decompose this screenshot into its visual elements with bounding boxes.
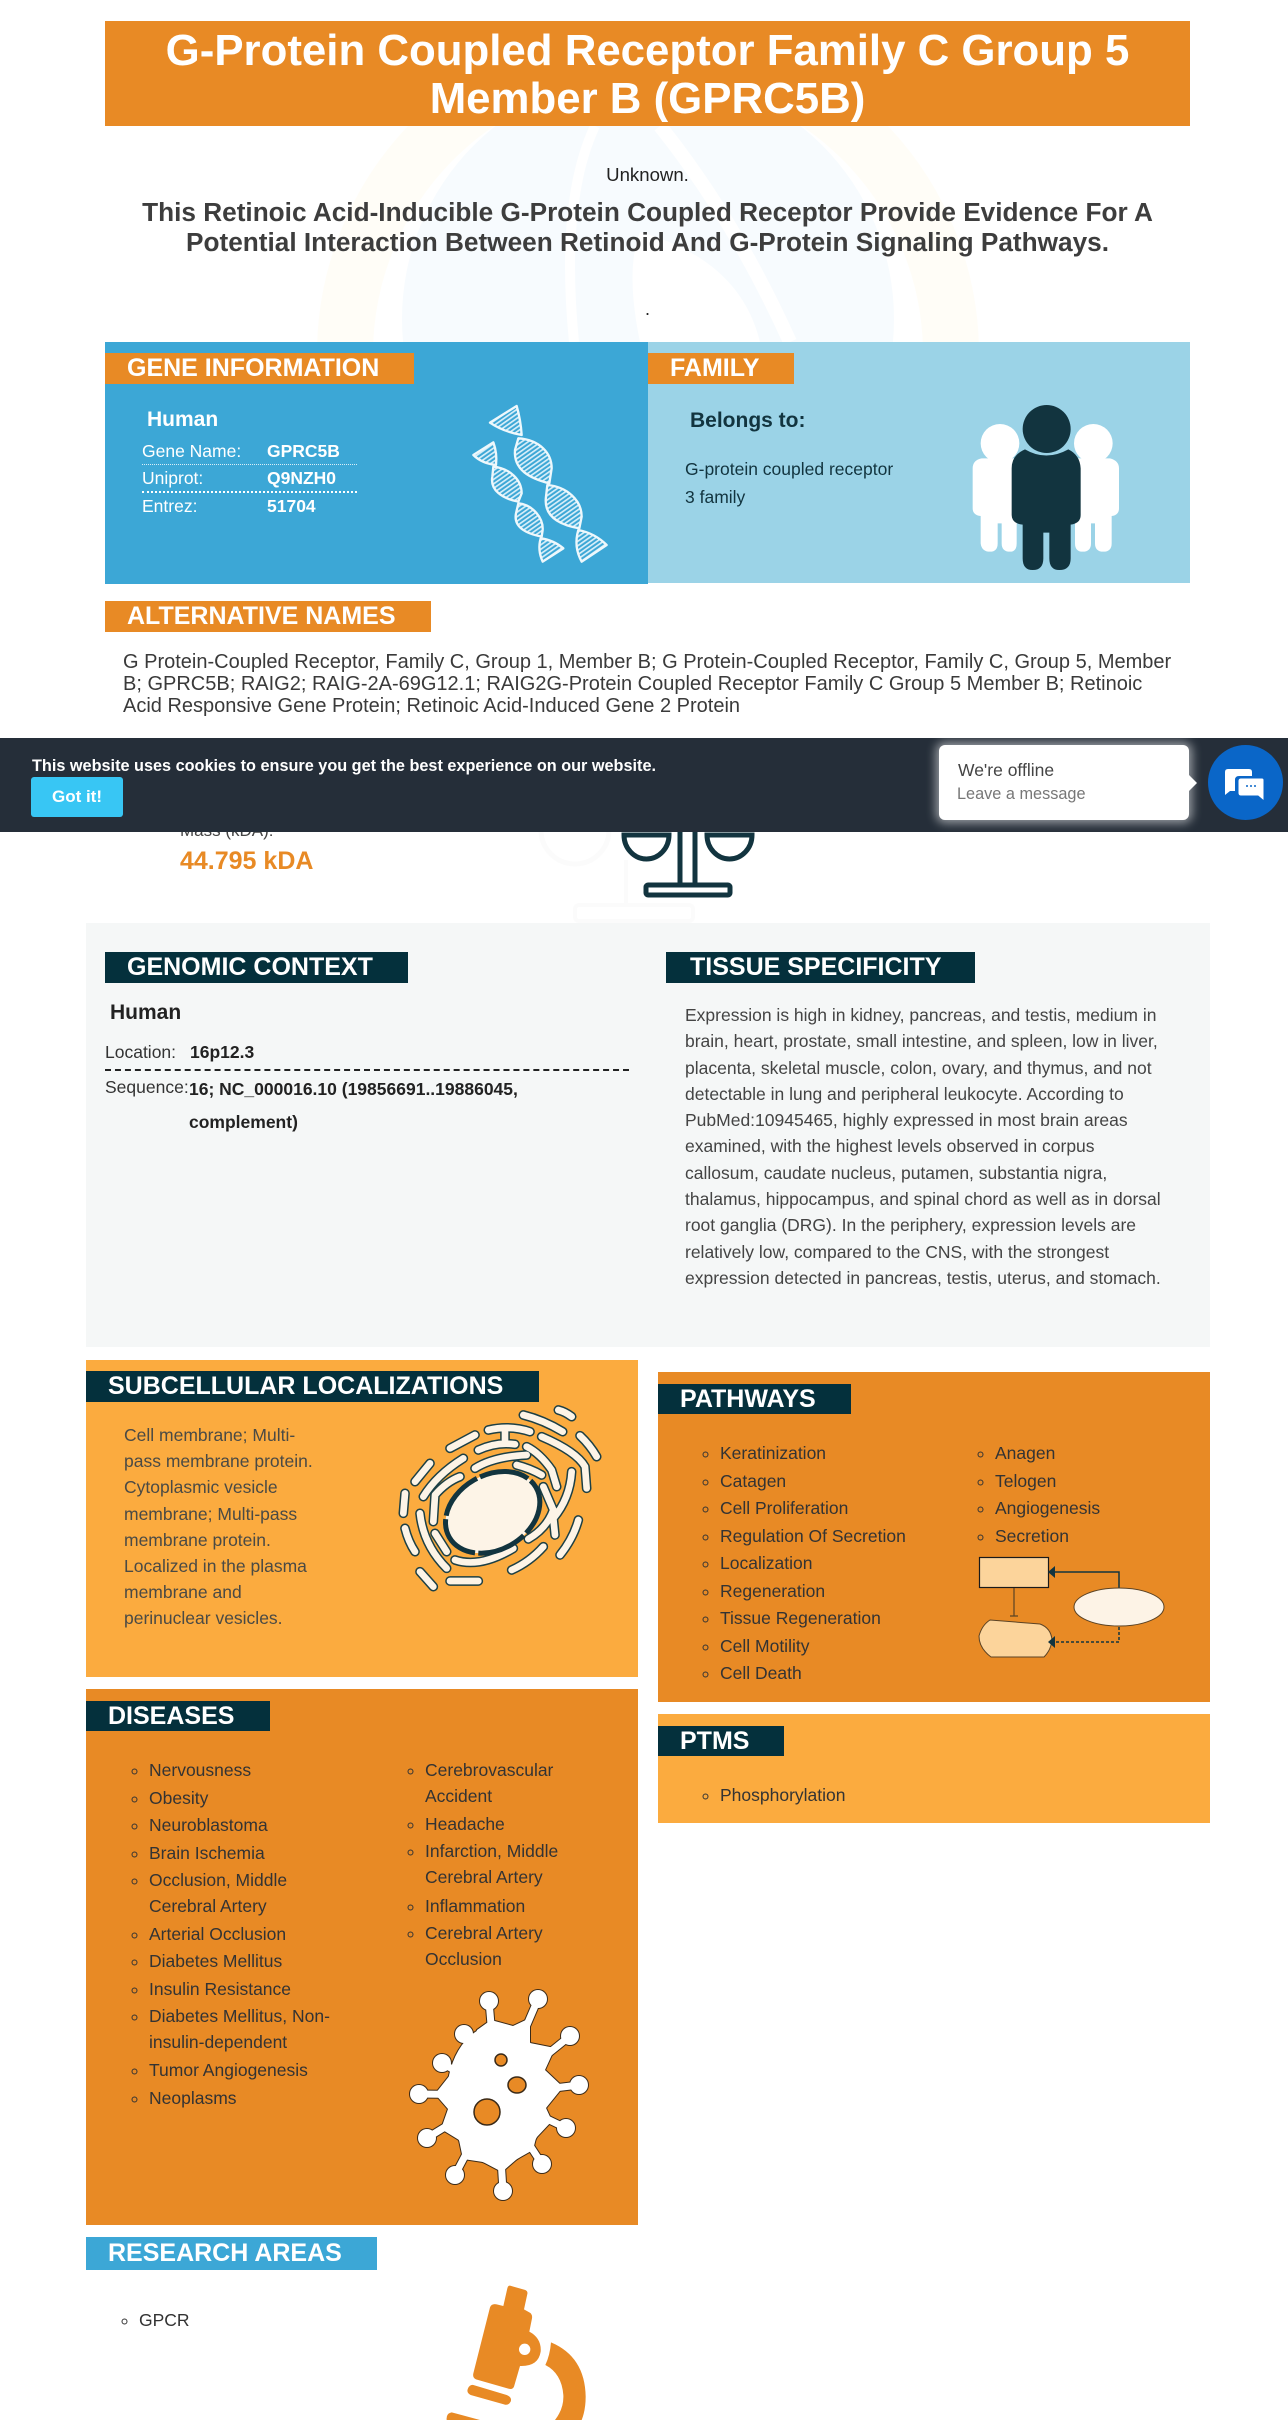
tissue specificity text: relatively low, compared to the CNS, with the strongest: [685, 1242, 1109, 1262]
panel: diseases: [86, 1689, 638, 2225]
cookie bar: [0, 738, 1288, 832]
species label: Human: [110, 1001, 181, 1024]
pathways list column 1: Keratinization: [720, 1443, 826, 1463]
sequence row: 16; NC_000016.10 (19856691..19886045,: [189, 1079, 518, 1099]
pathways list column 1: Tissue Regeneration: [720, 1608, 881, 1628]
tissue specificity text: expression detected in pancreas, testis, uterus, and stomach.: [685, 1268, 1161, 1288]
subcellular text: perinuclear vesicles.: [124, 1608, 283, 1628]
sequence row: Sequence:: [105, 1077, 189, 1097]
heading: family: FAMILY: [670, 354, 759, 382]
diseases list column 1: Arterial Occlusion: [149, 1924, 286, 1944]
diseases list column 2: Accident: [425, 1786, 492, 1806]
diseases list column 1: Cerebral Artery: [149, 1896, 267, 1916]
panel: subcellular localizations: [86, 1360, 638, 1677]
tissue specificity text: Expression is high in kidney, pancreas, and testis, medium in: [685, 1005, 1156, 1025]
tissue specificity text: [685, 1005, 1161, 1288]
pathways list column 2: Secretion: [995, 1526, 1069, 1546]
diseases list column 2: Infarction, Middle: [425, 1841, 558, 1861]
research areas list: GPCR: [139, 2310, 190, 2330]
cookie button: [31, 777, 123, 817]
diseases list column 1: Brain Ischemia: [149, 1843, 265, 1863]
sequence row: [105, 1077, 518, 1132]
pathways list column 1: Localization: [720, 1553, 812, 1573]
function text: Unknown.: [606, 164, 689, 185]
title banner: G-Protein Coupled Receptor Family C Group 5: [166, 26, 1129, 75]
heading: research areas: RESEARCH AREAS: [108, 2239, 342, 2267]
tissue specificity text: examined, with the highest levels observed in corpus: [685, 1136, 1095, 1156]
panel: ptms: [658, 1714, 1210, 1823]
pathways list column 2: Telogen: [995, 1471, 1056, 1491]
alternative names text: B; GPRC5B; RAIG2; RAIG-2A-69G12.1; RAIG2G-Protein Coupled Receptor Family C Group 5 Member B; Retinoic: [123, 673, 1142, 695]
heading: family: [648, 353, 794, 384]
pathways list column 2: Anagen: [995, 1443, 1055, 1463]
pathways list column 1: Cell Motility: [720, 1636, 809, 1656]
chat button: [1208, 745, 1283, 820]
icon: chat bubbles: [1225, 769, 1264, 800]
location row: Location:: [105, 1042, 176, 1062]
tissue specificity text: thalamus, hippocampus, and spinal chord as well as in dorsal: [685, 1189, 1161, 1209]
heading: alternative names: ALTERNATIVE NAMES: [127, 602, 396, 630]
species label: Human: [147, 408, 218, 431]
heading: pathways: [658, 1384, 851, 1414]
pathways list column 2: [978, 1443, 1100, 1546]
diseases list column 1: Insulin Resistance: [149, 1979, 291, 1999]
pathways list column 2: Angiogenesis: [995, 1498, 1100, 1518]
alternative names text: G Protein-Coupled Receptor, Family C, Group 1, Member B; G Protein-Coupled Receptor, Family C, Group 5, Member: [123, 651, 1171, 673]
heading: genomic context: GENOMIC CONTEXT: [127, 953, 373, 981]
panel: family: [648, 342, 1190, 583]
subcellular text: membrane; Multi-pass: [124, 1504, 297, 1524]
pathways list column 1: Regeneration: [720, 1581, 825, 1601]
heading: research areas: [86, 2237, 377, 2270]
heading: gene information: GENE INFORMATION: [127, 354, 379, 382]
icon: pathway diagram: [978, 1556, 1164, 1658]
dot text: .: [645, 299, 650, 319]
diseases list column 2: Cerebral Artery: [425, 1923, 543, 1943]
pathways list column 1: [702, 1443, 906, 1683]
location row: 16p12.3: [190, 1042, 254, 1062]
diseases list column 2: Occlusion: [425, 1949, 502, 1969]
subcellular text: pass membrane protein.: [124, 1451, 313, 1471]
panel: gene information: [105, 342, 648, 584]
icon: virus: [409, 1989, 589, 2201]
tissue specificity text: detectable in lung and peripheral leukocyte. According to: [685, 1084, 1124, 1104]
diseases list column 1: insulin-dependent: [149, 2032, 287, 2052]
icon: organelle: [398, 1405, 602, 1592]
heading: ptms: PTMS: [680, 1727, 749, 1755]
subcellular text: [124, 1425, 313, 1628]
gene table: 51704: [267, 496, 316, 516]
heading: diseases: [86, 1701, 270, 1731]
diseases list column 1: Diabetes Mellitus: [149, 1951, 282, 1971]
chat subtitle: Leave a message: [957, 785, 1086, 803]
panel: genomic context and tissue specificity: [86, 923, 1210, 1347]
heading: pathways: PATHWAYS: [680, 1385, 816, 1413]
diseases list column 2: Cerebrovascular: [425, 1760, 553, 1780]
pathways list column 1: Regulation Of Secretion: [720, 1526, 906, 1546]
diseases list column 1: [132, 1760, 330, 2108]
tissue specificity text: callosum, caudate nucleus, putamen, substantia nigra,: [685, 1163, 1107, 1183]
gene table: GPRC5B: [267, 441, 340, 461]
ptms list: Phosphorylation: [720, 1785, 846, 1805]
location row: [105, 1042, 629, 1071]
chat bubble pointer: [1189, 775, 1197, 791]
icon: dna helix: [472, 404, 608, 563]
belongs to label: Belongs to:: [690, 409, 806, 432]
diseases list column 1: Neoplasms: [149, 2088, 237, 2108]
subcellular text: membrane and: [124, 1582, 242, 1602]
family text: G-protein coupled receptor: [685, 459, 893, 479]
heading: ptms: [658, 1726, 784, 1756]
tissue specificity text: root ganglia (DRG). In the periphery, expression levels are: [685, 1215, 1136, 1235]
sequence row: complement): [189, 1112, 298, 1132]
panel: pathways: [658, 1372, 1210, 1702]
family text: 3 family: [685, 487, 745, 507]
diseases list column 1: Neuroblastoma: [149, 1815, 268, 1835]
icon: microscope: [446, 2286, 586, 2420]
alternative names text: [123, 651, 1171, 717]
diseases list column 2: Headache: [425, 1814, 505, 1834]
cookie button: Got it!: [52, 787, 102, 806]
subtitle: [142, 197, 1153, 257]
heading: diseases: DISEASES: [108, 1702, 234, 1730]
diseases list column 1: Tumor Angiogenesis: [149, 2060, 308, 2080]
diseases list column 2: [408, 1760, 558, 1969]
diseases list column 1: Occlusion, Middle: [149, 1870, 287, 1890]
pathways list column 1: Catagen: [720, 1471, 786, 1491]
gene table: Q9NZH0: [267, 468, 336, 488]
mass value: 44.795 kDA: [180, 847, 313, 875]
family text: [685, 459, 893, 507]
gene table: [142, 441, 357, 516]
cookie message: This website uses cookies to ensure you get the best experience on our website.: [32, 757, 656, 775]
heading: subcellular localizations: SUBCELLULAR LOCALIZATIONS: [108, 1372, 503, 1400]
gene table: Uniprot:: [142, 468, 203, 488]
diseases list column 1: Nervousness: [149, 1760, 251, 1780]
subcellular text: Cell membrane; Multi-: [124, 1425, 295, 1445]
mass label: Mass (kDA):: [180, 821, 274, 840]
subcellular text: Cytoplasmic vesicle: [124, 1477, 278, 1497]
chat offline bubble: [939, 745, 1189, 820]
pathways list column 1: Cell Death: [720, 1663, 802, 1683]
subtitle: This Retinoic Acid-Inducible G-Protein Coupled Receptor Provide Evidence For A: [142, 197, 1153, 227]
tissue specificity text: brain, heart, prostate, small intestine, and spleen, low in liver,: [685, 1031, 1158, 1051]
title banner: Member B (GPRC5B): [430, 74, 865, 123]
gene table: Entrez:: [142, 496, 197, 516]
subtitle: Potential Interaction Between Retinoid And G-Protein Signaling Pathways.: [186, 227, 1109, 257]
diseases list column 1: Obesity: [149, 1788, 208, 1808]
diseases list column 2: Inflammation: [425, 1896, 525, 1916]
subcellular text: Localized in the plasma: [124, 1556, 307, 1576]
icon: family people: [972, 405, 1119, 570]
subcellular text: membrane protein.: [124, 1530, 271, 1550]
diseases list column 1: Diabetes Mellitus, Non-: [149, 2006, 330, 2026]
title banner: [105, 21, 1190, 126]
tissue specificity text: placenta, skeletal muscle, colon, ovary, and thymus, and not: [685, 1058, 1152, 1078]
icon: balance scale: [622, 832, 754, 898]
chat title: We're offline: [958, 760, 1054, 780]
alternative names text: Acid Responsive Gene Protein; Retinoic Acid-Induced Gene 2 Protein: [123, 695, 740, 717]
gene table: Gene Name:: [142, 441, 241, 461]
diseases list column 2: Cerebral Artery: [425, 1867, 543, 1887]
pathways list column 1: Cell Proliferation: [720, 1498, 848, 1518]
tissue specificity text: PubMed:10945465, highly expressed in most brain areas: [685, 1110, 1128, 1130]
heading: tissue specificity: TISSUE SPECIFICITY: [690, 953, 941, 981]
